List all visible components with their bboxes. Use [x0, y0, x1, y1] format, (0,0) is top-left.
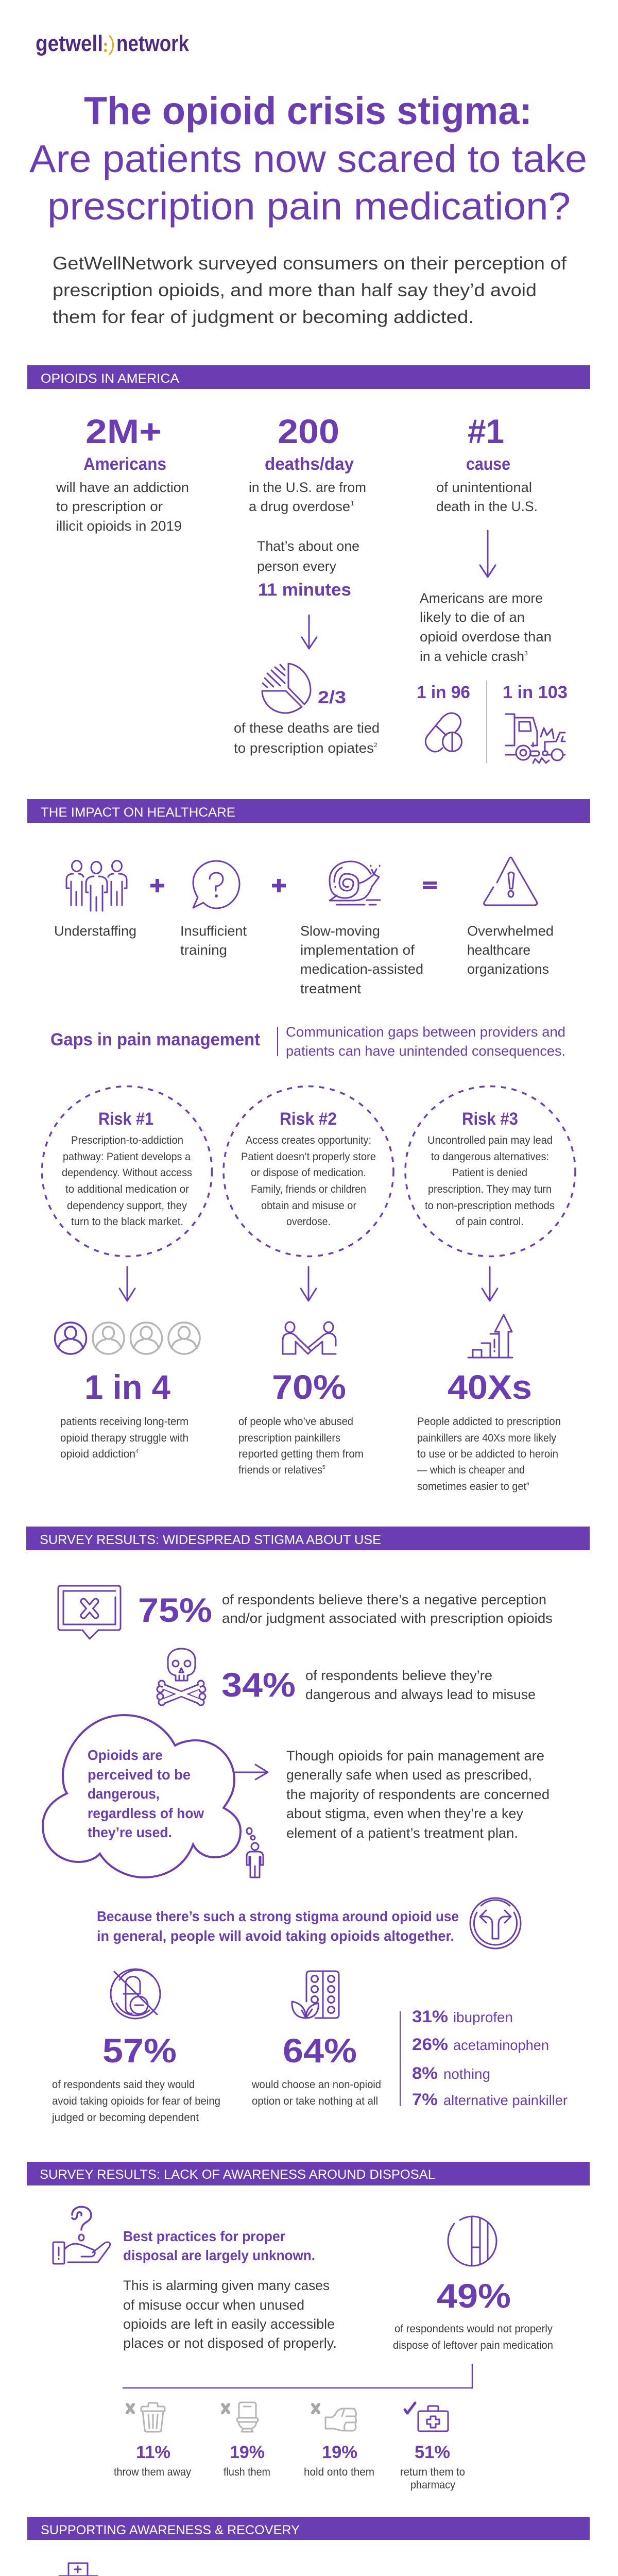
- stat: 70%: friends or relatives: [238, 1464, 322, 1476]
- icon: no pills: [111, 1969, 160, 2019]
- icon: trash can: [127, 2403, 165, 2432]
- icon: speech bubble with X: [58, 1586, 121, 1639]
- icon: warning triangle: [484, 857, 537, 905]
- callout: thought cloud: they’re used.: [88, 1824, 172, 1840]
- panel: risk 2: [224, 1086, 393, 1256]
- plus sign: [272, 879, 286, 892]
- stat: 2M+ Americans: Americans: [83, 454, 166, 474]
- icon: thinking person: [247, 1828, 263, 1877]
- stat: 64%: would choose an non-opioid: [251, 2079, 381, 2091]
- stat: 1 in 4: 4: [135, 1449, 139, 1454]
- icon: pie chart two thirds: [262, 664, 311, 713]
- stat: 2M+ Americans: illicit opioids in 2019: [56, 518, 182, 534]
- icon: question speech bubble: [193, 861, 239, 908]
- text block: alarming misuse: opioids are left in easily accessible: [123, 2316, 335, 2332]
- stat: 49%: dispose of leftover pain medication: [393, 2340, 553, 2351]
- stat: 75%: 75%: [138, 1591, 212, 1629]
- stat: 2M+ Americans: [56, 412, 189, 534]
- stat: 34%: 34%: [221, 1666, 296, 1704]
- icon labels: healthcare: [467, 942, 530, 958]
- stat: 70%: reported getting them from: [238, 1448, 364, 1460]
- text: vehicle crash comparison: in a vehicle crash: [420, 649, 524, 664]
- stat: 40Xs: sometimes easier to get: [417, 1481, 526, 1493]
- stat: 49%: [393, 2277, 553, 2351]
- panel: risk 1: [42, 1086, 212, 1256]
- heading: gaps in pain management: [50, 1024, 565, 1059]
- callout: thought cloud: regardless of how: [88, 1805, 204, 1821]
- icon: medical case with check: [405, 2403, 448, 2431]
- icon: snail: [330, 861, 380, 905]
- title: prescription pain medication?: [47, 184, 571, 228]
- icon: pills: [425, 713, 461, 752]
- section heading: impact on healthcare: [27, 799, 590, 823]
- panel: risk 2: Risk #2: [280, 1109, 337, 1129]
- stat: 57%: judged or becoming dependent: [52, 2112, 199, 2124]
- text: vehicle crash comparison: Americans are more: [420, 590, 543, 606]
- stat: 200 deaths per day: [249, 412, 366, 600]
- text block: alarming misuse: of misuse occur when unused: [123, 2297, 304, 2313]
- panel: risk 2: or dispose of medication.: [251, 1167, 366, 1179]
- icon: handshake: [283, 1322, 336, 1354]
- stat: 49%: of respondents would not properly: [394, 2323, 553, 2335]
- icon labels: [54, 923, 554, 996]
- equals sign: [423, 883, 437, 888]
- section heading: supporting awareness: SUPPORTING AWARENESS & RECOVERY: [41, 2523, 300, 2537]
- stat: #1 cause: cause: [466, 454, 510, 474]
- callout: thought cloud: perceived to be: [88, 1767, 191, 1783]
- list: alternative options: ibuprofen: [453, 2009, 513, 2025]
- disposal method percentages: flush them: [224, 2466, 270, 2478]
- heading: gaps in pain management: Communication gaps between providers and: [286, 1024, 565, 1040]
- stat: 40Xs: 6: [526, 1481, 529, 1487]
- callout: thought cloud: [43, 1715, 241, 1877]
- stat: 70%: prescription painkillers: [238, 1432, 340, 1444]
- text block: stigma explanation: element of a patient’s treatment plan.: [286, 1825, 518, 1841]
- logo: getwell network header: network: [116, 31, 189, 56]
- panel: risk 2: obtain and misuse or: [261, 1200, 356, 1212]
- icon labels: Overwhelmed: [467, 923, 554, 939]
- text block: stigma explanation: Though opioids for pain management are: [286, 1748, 544, 1764]
- intro text block: prescription opioids, and more than half say they’d avoid: [53, 280, 537, 300]
- stat: 2M+ Americans: 2M+: [85, 412, 162, 450]
- icon: half circle stripes: [448, 2216, 496, 2266]
- section heading: opioids in America: OPIOIDS IN AMERICA: [41, 371, 179, 386]
- panel: risk 3: prescription. They may turn: [428, 1183, 552, 1195]
- icon labels: treatment: [300, 981, 362, 996]
- stat: 75%: and/or judgment associated with prescription opioids: [222, 1611, 553, 1626]
- stat: 1 in 4: opioid therapy struggle with: [60, 1432, 188, 1444]
- stat: 64%: 64%: [283, 2031, 357, 2070]
- panel: risk 2: overdose.: [286, 1216, 331, 1228]
- disposal method percentages: [114, 2443, 465, 2491]
- icon labels: training: [180, 942, 227, 958]
- stat: 1 in 4: opioid addiction: [60, 1448, 135, 1460]
- disposal method percentages: pharmacy: [410, 2479, 455, 2491]
- text: best practices: Best practices for proper: [123, 2228, 285, 2244]
- stat: 200 deaths per day: 1: [351, 500, 354, 507]
- icon: rising bars with arrow: [468, 1315, 512, 1358]
- stat: 57%: 57%: [102, 2031, 177, 2070]
- stat: 200 deaths per day: a drug overdose: [249, 499, 350, 514]
- text: vehicle crash comparison: opioid overdose than: [420, 629, 552, 645]
- stat: 40Xs: — which is cheaper and: [417, 1464, 525, 1476]
- stat: two thirds: [234, 688, 380, 756]
- disposal method percentages: hold onto them: [304, 2466, 374, 2478]
- icon labels: Insufficient: [180, 923, 247, 939]
- text: vehicle crash comparison: [420, 590, 552, 664]
- stat: 200 deaths per day: person every: [257, 558, 336, 574]
- icon: three people understaffing: [66, 860, 127, 911]
- panel: risk 2: Patient doesn’t properly store: [241, 1151, 376, 1163]
- stat: #1 cause: death in the U.S.: [436, 499, 538, 514]
- arrow: [480, 531, 495, 577]
- intro text block: them for fear of judgment or becoming addicted.: [53, 307, 474, 327]
- panel: risk 3: Patient is denied: [452, 1167, 527, 1179]
- icon: skull and crossbones: [157, 1649, 205, 1705]
- panel: risk 3: Uncontrolled pain may lead: [427, 1134, 553, 1146]
- stat: 2M+ Americans: will have an addiction: [56, 480, 189, 495]
- panel: risk 3: to dangerous alternatives:: [431, 1151, 549, 1163]
- panel: risk 1: Risk #1: [98, 1109, 153, 1129]
- list: alternative options: 8%: [412, 2064, 438, 2082]
- text block: stigma explanation: about stigma, even when they’re a key: [286, 1806, 523, 1821]
- section heading: lack of awareness: SURVEY RESULTS: LACK OF AWARENESS AROUND DISPOSAL: [40, 2167, 435, 2182]
- stat: two thirds: 2: [374, 741, 377, 749]
- disposal method percentages: 11%: [136, 2443, 170, 2462]
- list: alternative options: 26%: [412, 2035, 448, 2054]
- stat: 70%: 70%: [272, 1368, 346, 1406]
- panel: risk 3: to non-prescription methods: [425, 1200, 555, 1212]
- stat: 1 in 4: patients receiving long-term: [60, 1416, 188, 1428]
- icon labels: Slow-moving: [300, 923, 380, 939]
- icon: blister pack and leaf: [292, 1971, 339, 2018]
- stat: 1 in 4: [60, 1368, 188, 1460]
- icon labels: medication-assisted: [300, 961, 423, 977]
- arrow: [235, 1765, 268, 1780]
- intro text block: GetWellNetwork surveyed consumers on their perception of: [53, 253, 566, 274]
- stat: 40Xs: to use or be addicted to heroin: [417, 1448, 558, 1460]
- callout: thought cloud: dangerous,: [88, 1786, 160, 1802]
- stat: 75%: of respondents believe there’s a negative perception: [222, 1592, 546, 1607]
- stat: 64%: option or take nothing at all: [252, 2095, 378, 2107]
- icon: one in four people: [55, 1323, 200, 1354]
- list: alternative options: alternative painkiller: [443, 2092, 568, 2108]
- arrows from risks to stats: [119, 1267, 497, 1301]
- text block: stigma explanation: generally safe when used as prescribed,: [286, 1767, 532, 1783]
- stat: 1 in 103: 1 in 103: [503, 683, 568, 702]
- panel: risk 2: Access creates opportunity:: [246, 1134, 371, 1146]
- stat: 200 deaths per day: That’s about one: [257, 538, 359, 554]
- disposal method percentages: throw them away: [114, 2466, 191, 2478]
- text block: alarming misuse: places or not disposed of properly.: [123, 2335, 337, 2351]
- panel: risk 1: Prescription-to-addiction: [71, 1134, 183, 1146]
- text block: alarming misuse: This is alarming given many cases: [123, 2278, 330, 2293]
- stat: 57%: [52, 2031, 220, 2124]
- stat: 1 in 96: 1 in 96: [417, 683, 470, 702]
- icon: clenched fist: [313, 2404, 356, 2431]
- icon: hospital: [46, 2563, 111, 2576]
- icon: toilet: [222, 2402, 258, 2432]
- stat: 2M+ Americans: to prescription or: [56, 499, 163, 514]
- stat: 40Xs: [417, 1368, 561, 1493]
- disposal method percentages: 51%: [415, 2443, 450, 2462]
- disposal method percentages: 19%: [230, 2443, 265, 2462]
- text: vehicle crash comparison: 3: [524, 650, 528, 657]
- icon: crashed vehicle: [506, 714, 565, 763]
- stat: 40Xs: painkillers are 40Xs more likely: [417, 1432, 556, 1444]
- icon: hand with question mark: [53, 2207, 110, 2264]
- callout: thought cloud: Opioids are: [88, 1747, 163, 1763]
- logo: getwell network header: [36, 31, 189, 56]
- arrow: [302, 615, 317, 649]
- section heading: widespread stigma: SURVEY RESULTS: WIDESPREAD STIGMA ABOUT USE: [40, 1533, 381, 1547]
- stat: 57%: avoid taking opioids for fear of being: [52, 2095, 220, 2107]
- stat: #1 cause: [436, 412, 538, 514]
- heading: avoid opioids altogether: [97, 1908, 459, 1944]
- panel: risk 1: dependency. Without access: [62, 1167, 192, 1179]
- list: alternative options: nothing: [443, 2066, 490, 2082]
- stat: 40Xs: 40Xs: [448, 1368, 532, 1406]
- stat: 1 in 4: 1 in 4: [84, 1368, 170, 1406]
- title: Are patients now scared to take: [29, 137, 587, 180]
- stat: two thirds: to prescription opiates: [234, 740, 374, 756]
- stat: 70%: of people who’ve abused: [238, 1416, 353, 1428]
- panel: risk 1: dependency support, they: [67, 1200, 187, 1212]
- heading: gaps in pain management: patients can have unintended consequences.: [286, 1043, 565, 1059]
- stat: 200 deaths per day: in the U.S. are from: [249, 480, 366, 495]
- panel: risk 3: [405, 1086, 575, 1256]
- text block: alarming misuse: [123, 2278, 337, 2351]
- text: best practices: [123, 2228, 315, 2263]
- stat: 40Xs: People addicted to prescription: [417, 1416, 561, 1428]
- stat: 75%: [138, 1591, 553, 1629]
- icon: crossroads sign: [470, 1898, 521, 1948]
- stat: 70%: [238, 1368, 364, 1476]
- panel: risk 1: pathway: Patient develops a: [63, 1151, 191, 1163]
- stat: 57%: of respondents said they would: [52, 2079, 195, 2091]
- stat: 70%: 5: [322, 1465, 325, 1470]
- text block: stigma explanation: the majority of respondents are concerned: [286, 1787, 550, 1802]
- text: best practices: disposal are largely unknown.: [123, 2247, 315, 2263]
- panel: risk 3: of pain control.: [456, 1216, 524, 1228]
- stat: 34%: [221, 1666, 536, 1704]
- stat: 64%: [251, 2031, 381, 2107]
- logo: getwell network header: getwell: [36, 31, 103, 56]
- panel: risk 1: turn to the black market.: [71, 1216, 183, 1228]
- stat: two thirds: 2/3: [318, 688, 346, 707]
- section heading: widespread stigma: [26, 1527, 590, 1550]
- plus sign: [150, 879, 164, 892]
- list: alternative options: 7%: [412, 2090, 438, 2109]
- stat: #1 cause: of unintentional: [436, 480, 532, 495]
- stat: 34%: of respondents believe they’re: [305, 1668, 492, 1683]
- disposal method percentages: return them to: [400, 2466, 465, 2478]
- section heading: impact on healthcare: THE IMPACT ON HEALTHCARE: [41, 805, 235, 820]
- icon labels: implementation of: [300, 942, 415, 958]
- heading: avoid opioids altogether: Because there’s such a strong stigma around opioid use: [97, 1908, 459, 1924]
- list: alternative options: 31%: [412, 2007, 448, 2026]
- stat: #1 cause: #1: [468, 412, 504, 450]
- heading: gaps in pain management: Gaps in pain management: [50, 1030, 260, 1049]
- text: vehicle crash comparison: likely to die of an: [420, 609, 525, 625]
- panel: risk 3: Risk #3: [462, 1109, 518, 1129]
- stat: 34%: dangerous and always lead to misuse: [305, 1687, 536, 1702]
- section heading: lack of awareness: [27, 2162, 590, 2185]
- panel: risk 1: to additional medication or: [65, 1183, 189, 1195]
- panel: risk 2: Family, friends or children: [251, 1183, 366, 1195]
- stat: 49%: 49%: [437, 2277, 511, 2315]
- heading: avoid opioids altogether: in general, people will avoid taking opioids altogether.: [97, 1928, 454, 1944]
- icon labels: Understaffing: [54, 923, 136, 939]
- list: alternative options: [400, 2007, 568, 2109]
- text block: stigma explanation: [286, 1748, 550, 1841]
- stat: two thirds: of these deaths are tied: [234, 720, 380, 736]
- intro text block: [53, 253, 566, 327]
- title: [29, 89, 587, 228]
- connector line: [123, 2364, 472, 2388]
- stat: 200 deaths per day: 200: [278, 412, 339, 450]
- stat: 200 deaths per day: deaths/day: [265, 454, 354, 474]
- section heading: supporting awareness: [27, 2517, 590, 2540]
- title: The opioid crisis stigma:: [84, 89, 532, 133]
- icon labels: organizations: [467, 961, 549, 977]
- disposal method percentages: 19%: [322, 2443, 357, 2462]
- stat: 200 deaths per day: 11 minutes: [258, 580, 351, 600]
- section heading: opioids in America: [27, 365, 590, 389]
- list: alternative options: acetaminophen: [453, 2037, 549, 2053]
